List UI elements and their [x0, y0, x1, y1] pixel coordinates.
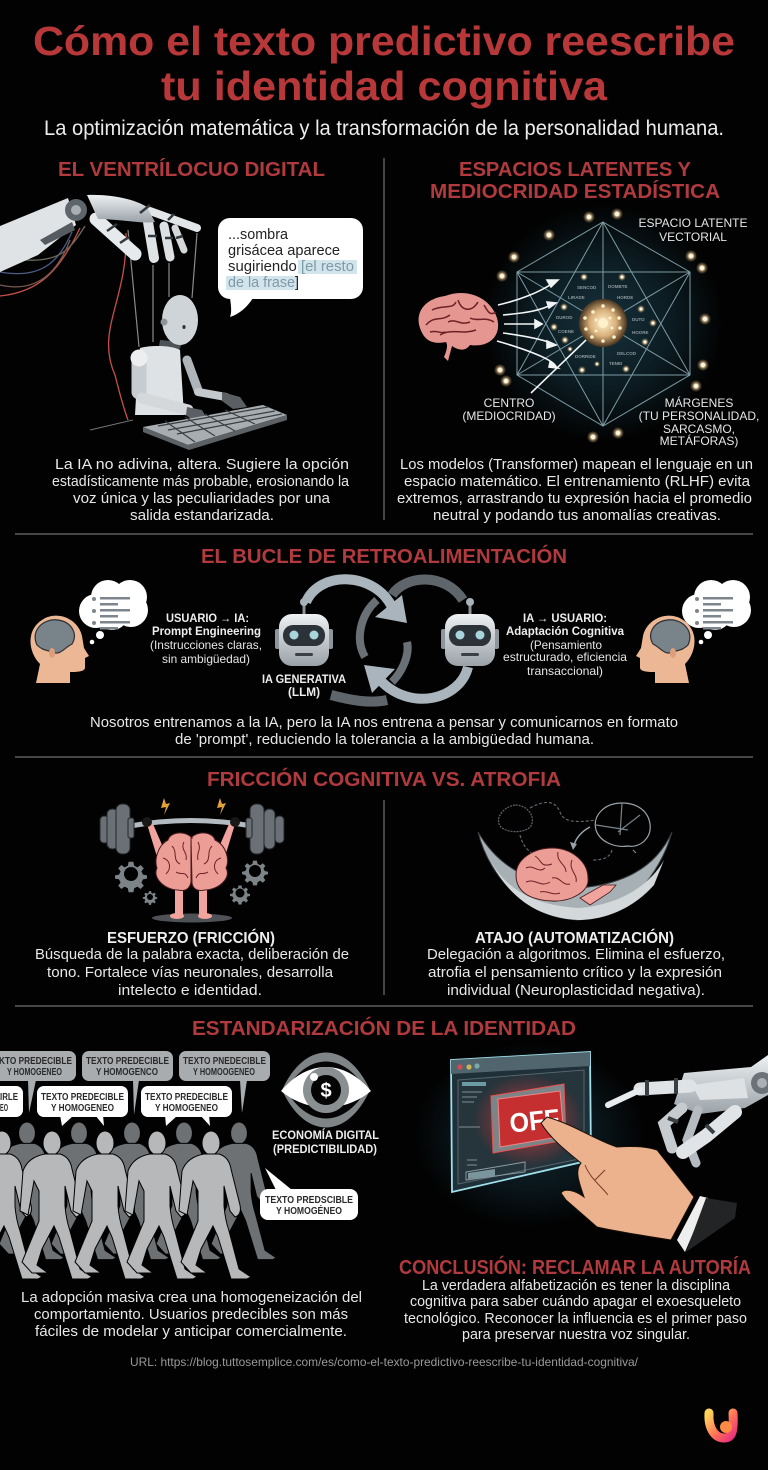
icon: word labels: SENCOD [577, 285, 597, 290]
subtitle: La optimización matemática y la transformación de la personalidad humana. [44, 117, 724, 140]
label: IA generativa: IA GENERATIVA [262, 672, 346, 686]
icon: brain in hammock [478, 802, 672, 920]
text block: esfuerzo: ESFUERZO (FRICCIÓN) [107, 928, 275, 947]
text block: esfuerzo: tono. Fortalece vías neuronales, desarrolla [47, 964, 334, 981]
callout: gray speech bubbles [0, 1051, 270, 1115]
text block: esfuerzo: Búsqueda de la palabra exacta, deliberación de [35, 946, 349, 963]
text block: conclusión: cognitiva para saber cuándo apagar el exoesqueleto [410, 1293, 741, 1310]
text block: atajo: ATAJO (AUTOMATIZACIÓN) [475, 928, 674, 947]
icon: feedback loop arrows [306, 579, 468, 702]
label: economía digital: (PREDICTIBILIDAD) [273, 1142, 377, 1156]
icon: word labels [556, 284, 649, 366]
title [33, 18, 735, 109]
heading: espacios latentes: MEDIOCRIDAD ESTADÍSTICA [430, 180, 720, 203]
source url: URL: https://blog.tuttosemplice.com/es/como-el-texto-predictivo-reescribe-tu-identidad-cognitiva/ [130, 1355, 639, 1369]
icon: word labels: HOORE [632, 330, 649, 335]
panel: conclusión [399, 1043, 768, 1343]
panel: espacios latentes [397, 159, 759, 524]
icon: robot arm wires [0, 226, 128, 420]
callout: white speech bubbles: TEXTO PREDECIBLE [41, 1092, 124, 1103]
heading: ventrílocuo: EL VENTRÍLOCUO DIGITAL [58, 158, 325, 181]
heading: bucle: EL BUCLE DE RETROALIMENTACIÓN [201, 544, 567, 568]
text block: bucle: de 'prompt', reduciendo la tolerancia a la ambigüedad humana. [175, 731, 594, 748]
callout: white speech bubbles: Y HOMOGENEO [51, 1103, 114, 1114]
text block: conclusión: tecnológico. Reconocer la influencia es el primer paso [404, 1310, 747, 1327]
text block: atajo: atrofia el pensamiento crítico y la expresión [428, 964, 722, 981]
icon: speech bubble: grisácea aparece [228, 242, 340, 259]
icon: surveillance eye: $ [320, 1080, 332, 1102]
icon: browser window with OFF button [451, 1052, 591, 1192]
text block: conclusión: La verdadera alfabetización es tener la disciplina [422, 1277, 731, 1294]
chart labels: VECTORIAL [659, 230, 727, 244]
icon: speech bubble: ...sombra [228, 226, 289, 243]
panel: bucle de retroalimentación [30, 544, 751, 748]
text block: espacios latentes [397, 456, 753, 524]
label: economía digital [272, 1127, 379, 1156]
callout: gray speech bubbles: Y HOMOOGENEO [193, 1067, 255, 1078]
icon: left AI robot [275, 598, 333, 666]
text block: esfuerzo [35, 928, 349, 999]
icon: logo [709, 1413, 733, 1438]
label: IA generativa [262, 672, 346, 699]
icon: word labels: LIRADE [568, 295, 585, 300]
text block: estandarización: fáciles de modelar y anticipar comercialmente. [35, 1323, 347, 1340]
icon: word labels: DUTO [632, 317, 645, 322]
text block: atajo: individual (Neuroplasticidad negativa). [447, 982, 705, 999]
icon: speech bubble [218, 218, 363, 317]
text block: estandarización: comportamiento. Usuarios predecibles son más [34, 1306, 348, 1323]
text block: conclusión: para preservar nuestra voz singular. [462, 1326, 690, 1343]
chart labels: CENTRO [484, 396, 534, 410]
icon: word labels: DORRIDE [575, 354, 596, 359]
label: IA a usuario: (Pensamiento [530, 638, 602, 652]
callout: gray speech bubbles: Y HOMOGENEO [7, 1067, 62, 1078]
icon: surveillance eye [281, 1052, 371, 1128]
icon: word labels: HORDE [617, 295, 633, 300]
chart labels: SARCASMO, [663, 422, 735, 436]
text block: espacios latentes: Los modelos (Transformer) mapean el lenguaje en un [400, 456, 753, 473]
text block: ventrílocuo: voz única y las peculiaridades por una [73, 490, 331, 507]
icon: central cluster [579, 299, 627, 347]
label: usuario a IA: sin ambigüedad) [162, 652, 250, 666]
chart labels: (TU PERSONALIDAD, [639, 409, 759, 423]
icon: word labels: DELCOD [617, 351, 637, 356]
callout: white speech bubbles: EO [0, 1103, 8, 1114]
text block: ventrílocuo: salida estandarizada. [130, 507, 274, 524]
label: IA a usuario: IA → USUARIO: [523, 611, 607, 625]
panel: el ventrílocuo digital [0, 158, 363, 524]
callout: white speech bubbles: TEXTO PREDECIBLE [145, 1092, 228, 1103]
text block: ventrílocuo [52, 456, 350, 524]
text block: estandarización [21, 1289, 362, 1340]
label: IA a usuario: transaccional) [527, 664, 603, 678]
label: usuario a IA: (Instrucciones claras, [150, 638, 262, 652]
title: tu identidad cognitiva [161, 63, 608, 109]
icon: giant robot hand [0, 195, 197, 272]
heading: fricción: FRICCIÓN COGNITIVA VS. ATROFIA [207, 767, 561, 791]
text block: esfuerzo: intelecto e identidad. [118, 982, 262, 999]
label: IA generativa: (LLM) [288, 685, 320, 699]
callout: bottom speech bubble: Y HOMOGÉNEO [276, 1204, 342, 1217]
chart labels: MÁRGENES [665, 395, 733, 410]
icon: outer dots [494, 208, 711, 443]
chart labels: METÁFORAS) [660, 433, 738, 448]
icon: typing robot [90, 295, 287, 450]
icon: left user head [30, 580, 148, 683]
text block: bucle: Nosotros entrenamos a la IA, pero la IA nos entrena a pensar y comunicarnos en formato [90, 714, 678, 731]
chart labels [462, 216, 759, 448]
callout: white speech bubbles: Y HOMOGENEO [155, 1103, 218, 1114]
icon: side brain [419, 293, 498, 361]
panel: estandarización de la identidad [0, 1051, 379, 1340]
text block: conclusión [404, 1277, 747, 1343]
callout: white speech bubbles: IRLE [0, 1092, 18, 1103]
text block: ventrílocuo: estadísticamente más probable, erosionando la [52, 473, 350, 490]
panel: fricción vs atrofia [35, 767, 725, 999]
icon: right AI robot [441, 598, 499, 666]
icon: word labels: DUROD [556, 315, 573, 320]
title: Cómo el texto predictivo reescribe [33, 18, 735, 64]
icon: right user head [636, 580, 751, 683]
text block: espacios latentes: extremos, arrastrando tu expresión hacia el promedio [397, 490, 752, 507]
text block: atajo [427, 928, 725, 999]
label: IA a usuario: estructurado, eficiencia [503, 650, 627, 664]
icon: speech bubble: sugiriendo [el resto [228, 258, 354, 275]
chart: latent space polytope [483, 205, 723, 443]
callout: gray speech bubbles: KTO PREDECIBLE [0, 1056, 72, 1067]
callout: gray speech bubbles: TEXTO PREDECIBLE [86, 1056, 169, 1067]
text block: ventrílocuo: La IA no adivina, altera. Sugiere la opción [55, 456, 349, 473]
arrows [497, 280, 586, 393]
icon: speech bubble: de la frase] [228, 274, 299, 291]
icon: human hand pressing OFF [541, 1117, 737, 1252]
icon: robot pointing hand [608, 1055, 768, 1163]
icon: browser window with OFF button: OFF [508, 1103, 561, 1139]
text block: estandarización: La adopción masiva crea una homogeneización del [21, 1289, 362, 1306]
text block: bucle [90, 714, 678, 748]
icon: word labels: COENE [558, 329, 574, 334]
callout: gray speech bubbles: TEXTO PNEDECIBLE [183, 1056, 266, 1067]
label: usuario a IA: USUARIO → IA: [166, 611, 249, 625]
label: IA a usuario [503, 611, 627, 678]
chart labels: (MEDIOCRIDAD) [462, 409, 556, 423]
icon: puppet strings [128, 230, 197, 347]
chart labels: ESPACIO LATENTE [639, 216, 747, 230]
icon: brain lifting barbell [100, 798, 284, 922]
label: usuario a IA [150, 611, 262, 666]
icon: word labels: DOMBTE [608, 284, 628, 289]
callout: bottom speech bubble [260, 1168, 358, 1220]
callout: bottom speech bubble: TEXTO PREDSCIBLE [265, 1195, 353, 1206]
callout: white speech bubbles [0, 1086, 232, 1126]
label: economía digital: ECONOMÍA DIGITAL [272, 1127, 379, 1142]
text block: espacios latentes: neutral y podando tus anomalías creativas. [433, 507, 721, 524]
icon: word labels: TENEI [609, 361, 622, 366]
heading: estandarización: ESTANDARIZACIÓN DE LA IDENTIDAD [192, 1016, 576, 1040]
label: usuario a IA: Prompt Engineering [152, 624, 261, 638]
callout: gray speech bubbles: Y HOMOGENCO [96, 1067, 158, 1078]
heading: espacios latentes [430, 159, 720, 203]
icon: crowd back row [0, 1122, 276, 1260]
heading: espacios latentes: ESPACIOS LATENTES Y [459, 159, 692, 181]
icon: crowd front row [0, 1131, 251, 1279]
text block: espacios latentes: espacio matemático. El entrenamiento (RLHF) evita [404, 473, 751, 490]
label: IA a usuario: Adaptación Cognitiva [506, 624, 624, 638]
text block: atajo: Delegación a algoritmos. Elimina el esfuerzo, [427, 946, 725, 963]
